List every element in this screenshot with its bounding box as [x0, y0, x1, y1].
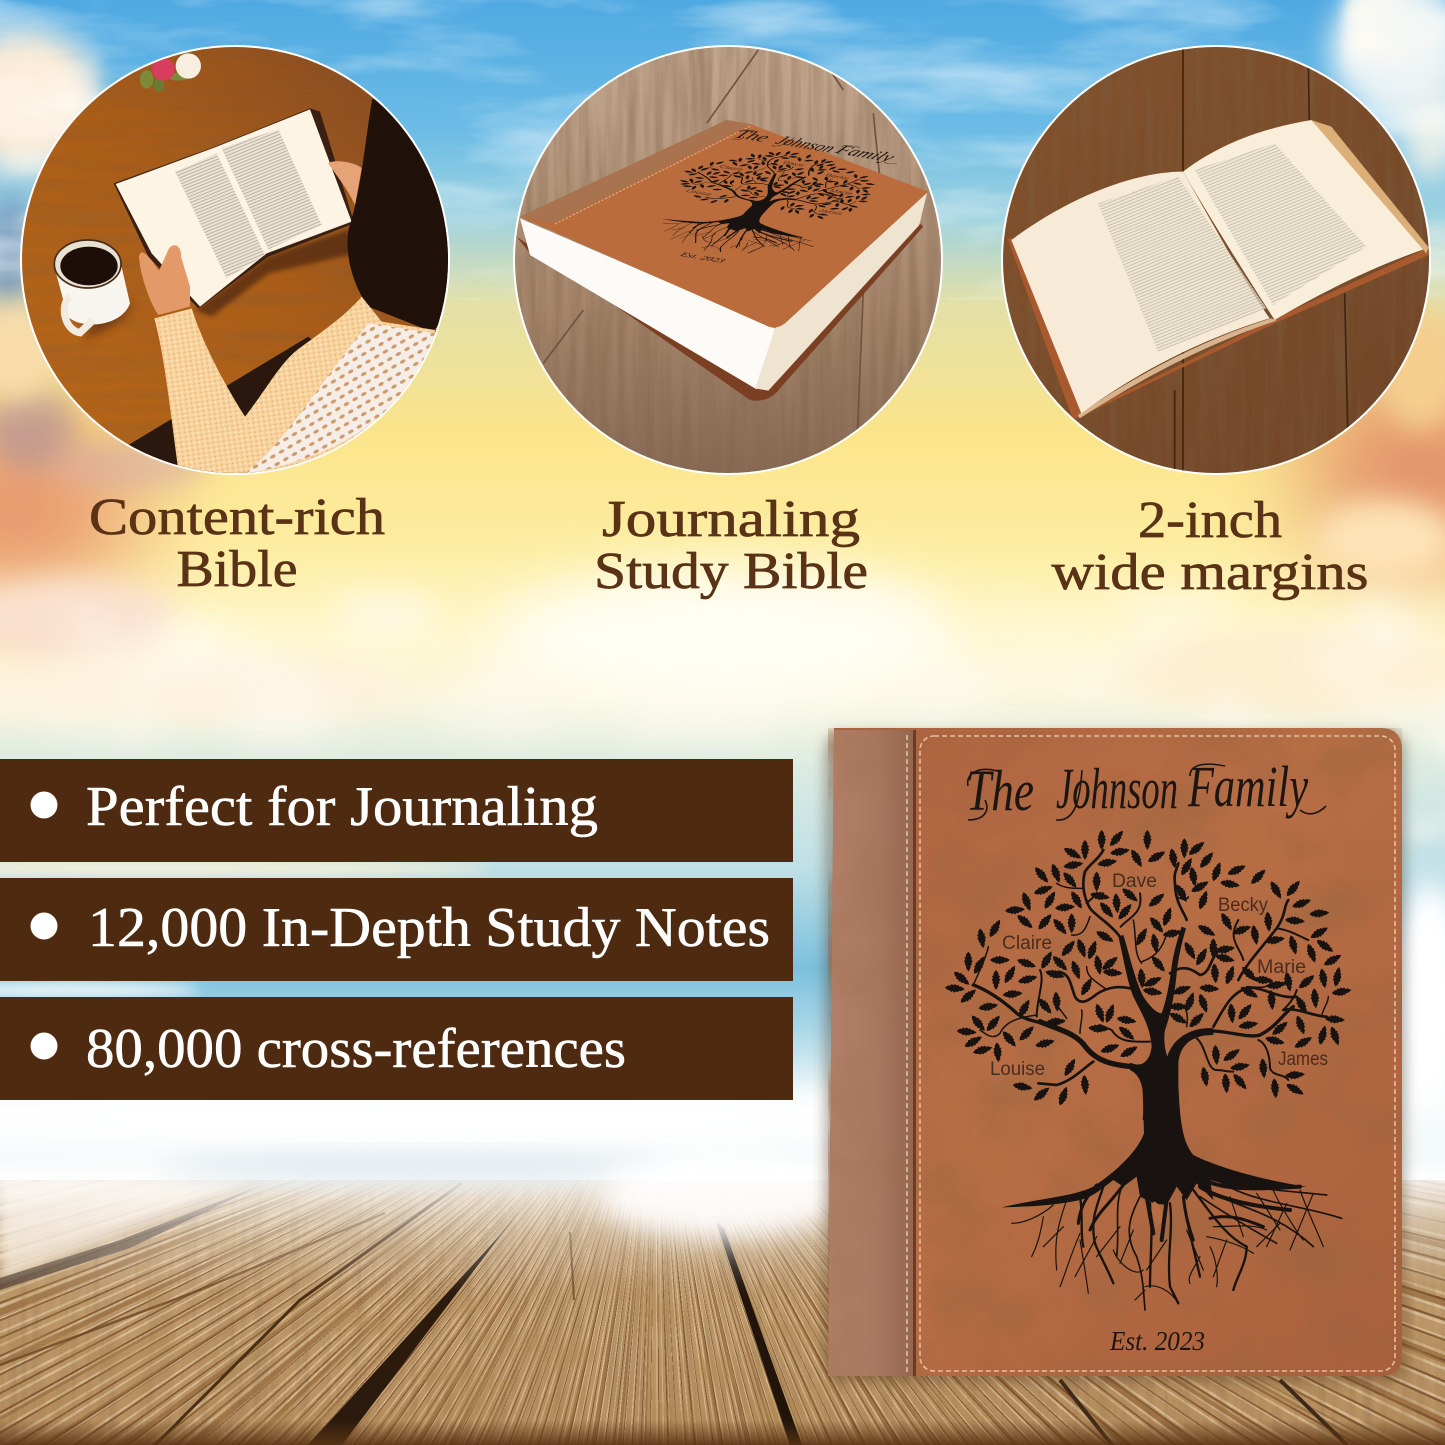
feature bar: 12,000 In-Depth Study Notes: 12,000 In-Depth Study Notes [88, 897, 770, 959]
feature bar: Perfect for Journaling [0, 759, 793, 862]
roots [1002, 1090, 1342, 1310]
engraved names: Marie [1257, 957, 1306, 978]
small copy of the cover engraving [603, 124, 920, 275]
feature bar: 80,000 cross-references: 80,000 cross-references [86, 1018, 626, 1080]
engraved names: Dave [1112, 871, 1157, 892]
engraved names: Claire [1002, 933, 1052, 954]
photo circle: woman reading a Bible at a table [20, 45, 450, 480]
flowers [140, 53, 201, 92]
engraved title [966, 754, 1326, 823]
hair [347, 98, 450, 332]
engraved names: Louise [990, 1059, 1045, 1080]
engraved date: Est. 2023 [1109, 1326, 1205, 1356]
oak leaves [945, 828, 1352, 1107]
feature bar: 12,000 In-Depth Study Notes [0, 878, 793, 981]
caption: 2-inch wide margins [1052, 492, 1368, 601]
trunk [1118, 927, 1213, 1120]
caption: 2-inch wide margins: 2-inch [1138, 492, 1282, 549]
cover engraving [945, 754, 1352, 1356]
caption: 2-inch wide margins: wide margins [1052, 544, 1368, 601]
feature bar: Perfect for Journaling: Perfect for Journaling [86, 776, 598, 838]
mug [54, 240, 130, 333]
hands [139, 245, 190, 315]
engraved title: Johnson [1056, 756, 1178, 821]
caption: Content-rich Bible: Content-rich [89, 489, 385, 546]
engraved names [990, 871, 1328, 1080]
photo circle: open Bible with wide margins [1001, 45, 1431, 475]
product: personalised leather Bible cover [824, 728, 1406, 1382]
feature bar: 80,000 cross-references [0, 997, 793, 1100]
caption: Content-rich Bible: Bible [176, 541, 298, 598]
table edge and shadow [128, 336, 312, 473]
family tree [945, 828, 1352, 1120]
photo circle: closed personalised Bible on wood [513, 45, 943, 475]
open book [114, 108, 354, 308]
caption: Journaling Study Bible: Journaling [602, 491, 860, 548]
wooden tabletop [0, 1150, 1445, 1445]
sweater [154, 297, 435, 477]
engraved title: The [966, 758, 1034, 823]
cover stitching [920, 736, 1395, 1371]
caption: Content-rich Bible [89, 489, 385, 598]
spine [828, 730, 914, 1376]
caption: Journaling Study Bible [594, 491, 868, 600]
caption: Journaling Study Bible: Study Bible [594, 543, 868, 600]
branches [973, 850, 1328, 1085]
engraved title: Family [1187, 754, 1308, 819]
engraved names: Becky [1218, 895, 1268, 916]
engraved names: James [1278, 1049, 1328, 1070]
